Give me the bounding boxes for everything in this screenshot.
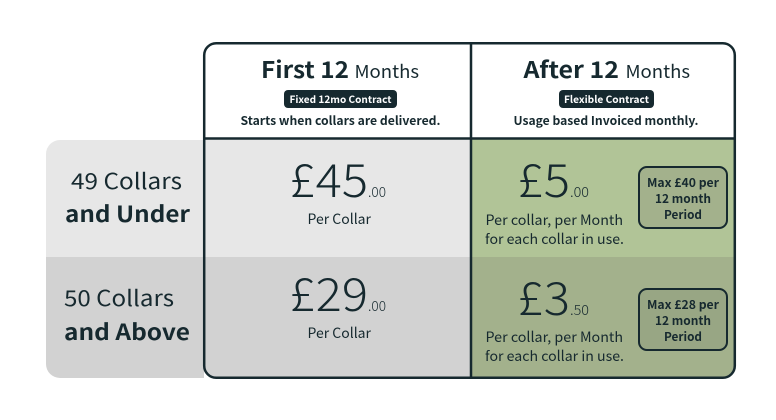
heading: first 12 months: Months	[354, 58, 419, 84]
heading: after 12 months: After 12	[522, 51, 619, 85]
text: 50 collars and above: and Above	[64, 315, 190, 347]
callout: max 40: Period	[664, 206, 702, 223]
panel: after 12 months prices	[471, 139, 734, 377]
heading: first 12 months	[240, 51, 441, 129]
panel: first 12 months prices	[205, 139, 471, 377]
price: 5 pounds: .00	[570, 182, 589, 202]
price: 29 pounds	[290, 259, 386, 343]
text: 50 collars and above: 50 Collars	[64, 281, 174, 313]
price: 3.50 pounds	[485, 263, 624, 366]
text: 49 collars and under: and Under	[65, 197, 190, 229]
subheading: starts when delivered: Starts when collars are delivered.	[240, 112, 441, 129]
callout: max 40: Max £40 per	[647, 174, 720, 191]
table frame	[204, 43, 735, 378]
price: 5 pounds	[485, 145, 624, 249]
badge: fixed contract: Fixed 12mo Contract	[290, 91, 392, 106]
callout: max 40: 12 month	[655, 190, 711, 207]
price: 29 pounds: £29	[290, 259, 368, 325]
price: 29 pounds: Per Collar	[308, 323, 372, 343]
price: 3.50 pounds: for each collar in use.	[485, 346, 624, 366]
price: 5 pounds: for each collar in use.	[485, 229, 624, 249]
price: 3.50 pounds: .50	[570, 300, 589, 320]
panel: row labels	[46, 140, 204, 378]
heading: first 12 months: First 12	[261, 51, 349, 85]
price: 45 pounds: .00	[368, 182, 386, 202]
price: 3.50 pounds: Per collar, per Month	[486, 327, 623, 347]
text: 49 collars and under	[65, 164, 190, 229]
text: 50 collars and above	[64, 281, 190, 347]
price: 3.50 pounds: £3	[518, 263, 570, 329]
subheading: usage based: Usage based Invoiced monthly.	[514, 112, 699, 129]
heading: after 12 months	[514, 51, 699, 129]
callout: max 28: Max £28 per	[647, 296, 720, 313]
callout: max 40	[639, 167, 727, 228]
heading: after 12 months: Months	[626, 58, 690, 84]
price: 5 pounds: Per collar, per Month	[486, 210, 623, 230]
callout: max 28: Period	[664, 328, 702, 345]
callout: max 28	[639, 289, 727, 350]
price: 45 pounds	[290, 145, 386, 229]
callout: max 28: 12 month	[655, 312, 711, 329]
price: 29 pounds: .00	[368, 296, 386, 316]
price: 5 pounds: £5	[518, 145, 570, 211]
price: 45 pounds: £45	[290, 145, 368, 211]
badge: flexible contract: Flexible Contract	[564, 91, 650, 106]
text: 49 collars and under: 49 Collars	[71, 164, 182, 196]
price: 45 pounds: Per Collar	[308, 209, 372, 229]
